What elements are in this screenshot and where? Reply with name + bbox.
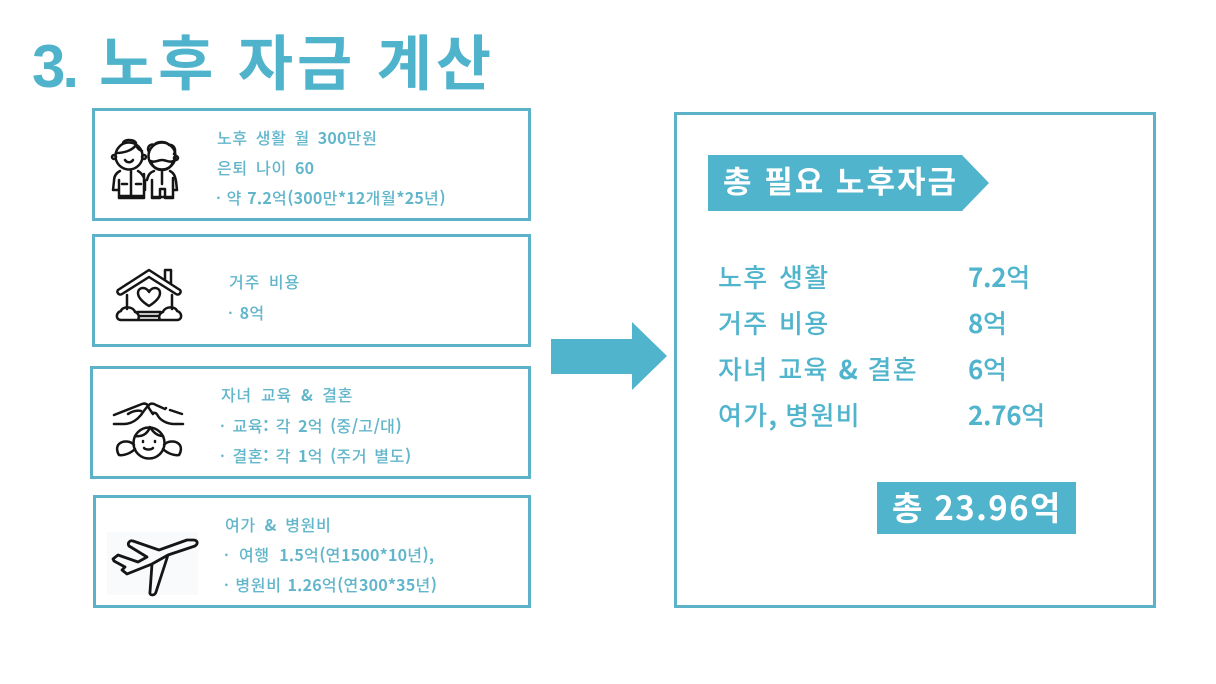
text: housing cost: · 8억 [228, 300, 265, 324]
icon: elderly couple [110, 138, 180, 200]
summary list: 6억 [968, 350, 1008, 387]
text: leisure and medical: · 병원비 1.26억(연300*35년) [224, 572, 437, 596]
summary list: 8억 [968, 304, 1008, 341]
summary list [718, 258, 1047, 433]
title: 3. [32, 33, 76, 100]
title: 노후 자금 계산 [99, 16, 495, 103]
text: living expenses: 은퇴 나이 60 [217, 155, 314, 179]
summary list: 자녀 교육 & 결혼 [718, 350, 918, 387]
icon: airplane [112, 538, 199, 596]
text: living expenses: 노후 생활 월 300만원 [217, 125, 378, 149]
summary list: 7.2억 [968, 258, 1032, 295]
banner heading: 총 필요 노후자금 [723, 157, 958, 202]
panel: total required retirement funds [674, 112, 1156, 608]
text: education and marriage: 자녀 교육 & 결혼 [221, 382, 353, 406]
text: housing cost [228, 269, 300, 324]
text: education and marriage [220, 382, 411, 467]
summary list: 여가, 병원비 [718, 396, 861, 433]
text: education and marriage: · 결혼: 각 1억 (주거 별도) [220, 443, 411, 467]
text: housing cost: 거주 비용 [229, 269, 300, 293]
text: leisure and medical: · 여행 1.5억(연1500*10년), [224, 542, 434, 566]
icon: house with heart [116, 268, 182, 322]
panel: education and marriage [90, 366, 531, 479]
panel: housing cost [92, 234, 531, 347]
text: living expenses: · 약 7.2억(300만*12개월*25년) [216, 185, 446, 209]
text: leisure and medical [224, 512, 437, 596]
panel: living expenses [92, 108, 531, 221]
summary list: 노후 생활 [718, 258, 829, 295]
text: education and marriage: · 교육: 각 2억 (중/고/대) [220, 413, 402, 437]
summary list: 거주 비용 [718, 304, 829, 341]
text: leisure and medical: 여가 & 병원비 [225, 512, 332, 536]
summary list: 2.76억 [968, 396, 1047, 433]
text: living expenses [216, 125, 446, 209]
icon: hands over child [112, 402, 184, 460]
panel: leisure and medical [93, 495, 531, 608]
arrow [551, 322, 667, 390]
banner heading [708, 155, 989, 211]
total callout: 총 23.96억 [892, 482, 1062, 530]
